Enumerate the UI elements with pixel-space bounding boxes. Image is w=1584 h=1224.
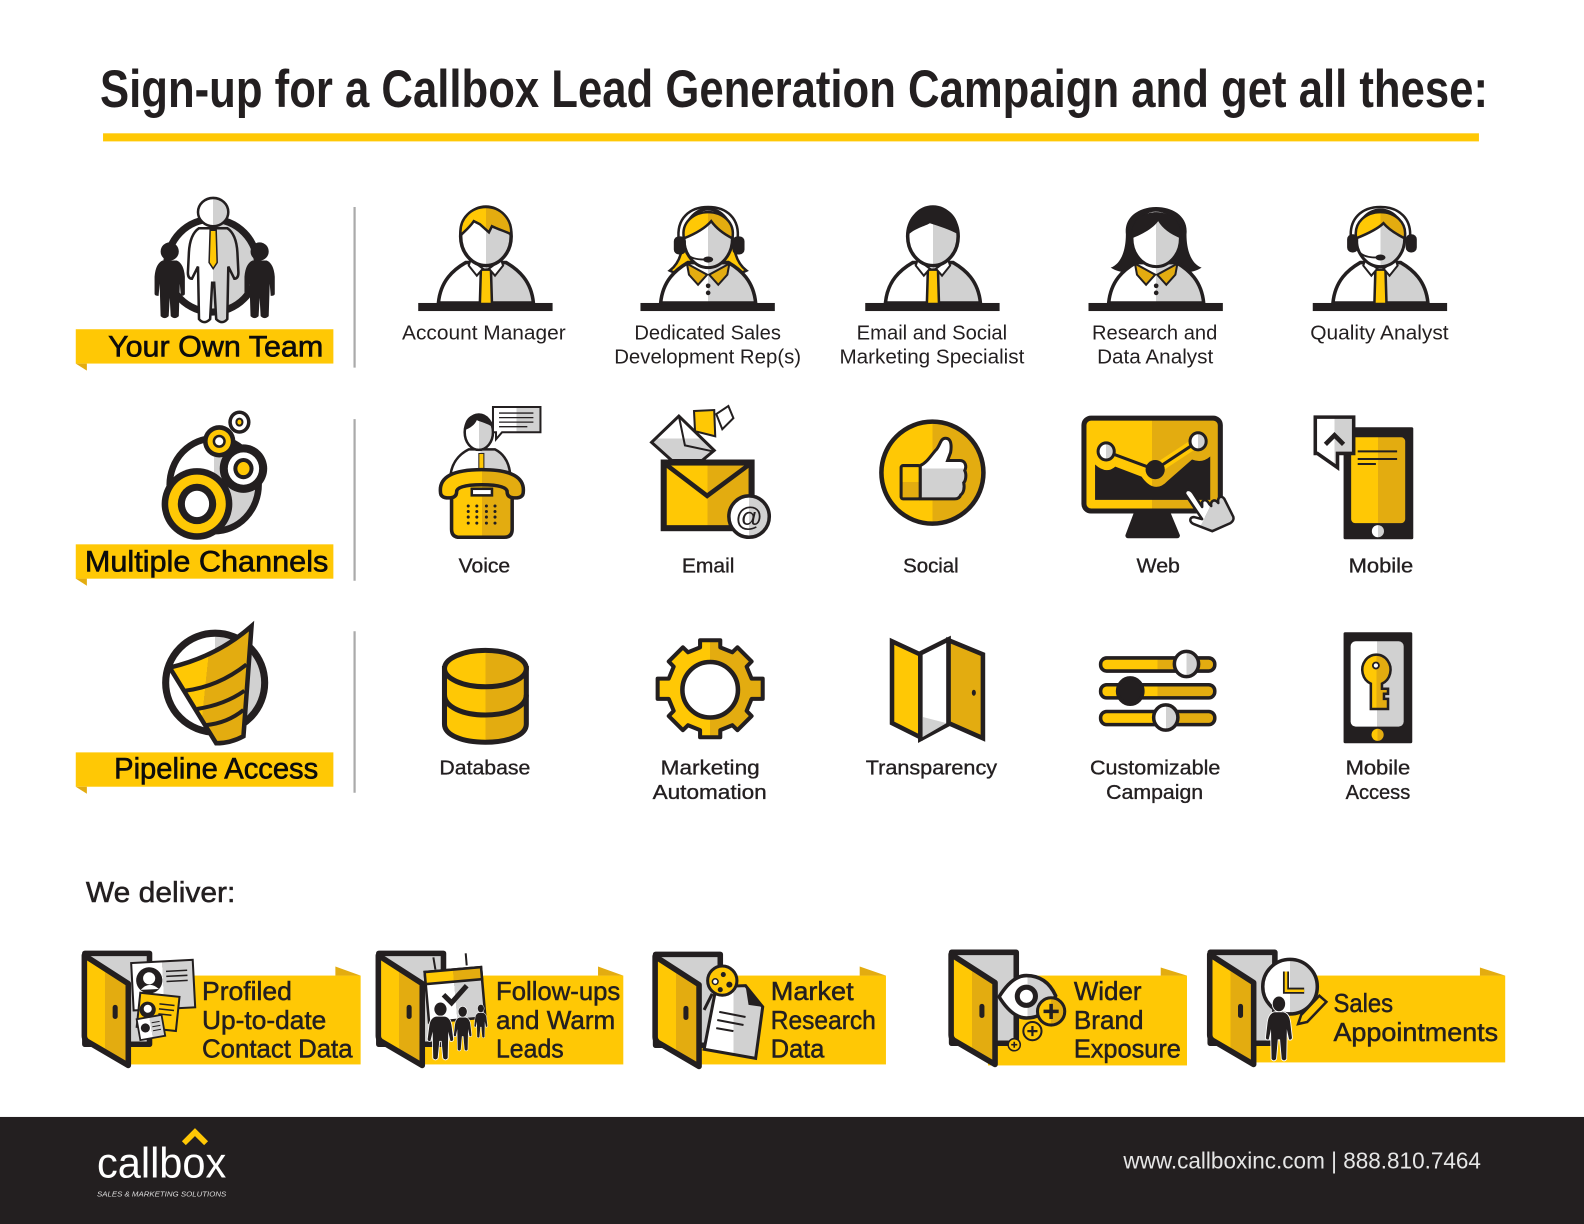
label: Contact Data [202,1033,353,1063]
label: social: Social [903,555,959,578]
label: dedicated sales development rep: Dedicated Sales [634,321,781,344]
deliverable: profiled up-to-date contact data [84,953,361,1065]
label: Wider [1074,976,1142,1006]
logo: callbox [97,1132,226,1199]
label: research and data analyst [1092,321,1217,369]
label: mobile access [1346,757,1410,804]
label: mobile access: Access [1346,781,1410,804]
label [1333,988,1498,1047]
label: dedicated sales development rep: Development Rep(s) [614,346,801,369]
label: and Warm [496,1005,615,1035]
label: mobile access: Mobile [1346,757,1410,780]
icon: research analyst [1088,207,1223,311]
label: quality analyst: Quality Analyst [1310,321,1449,344]
label: marketing automation: Automation [653,781,767,804]
label: research and data analyst: Data Analyst [1097,346,1213,369]
deliverable: sales appointments [1210,952,1505,1064]
label: Data [771,1033,825,1063]
label: email and social marketing specialist: Marketing Specialist [839,346,1025,369]
label: Research [771,1005,876,1035]
deliverable: follow-ups and warm leads [378,953,623,1065]
label: research and data analyst: Research and [1092,321,1217,344]
icon: monitor with chart and hand [1084,418,1234,538]
label: Follow-ups [496,976,620,1006]
item: social [881,422,983,578]
icon: door with calendar and people [378,953,487,1065]
icon: envelopes with at sign: @ [735,501,763,532]
label: Market [771,976,854,1006]
panel: multiple channels [76,411,333,586]
item: email [652,406,769,578]
icon: phone with key [1344,632,1412,743]
icon: door with document and magnifier [655,954,763,1066]
label: Sales [1333,988,1393,1018]
deliverable: wider brand exposure [951,952,1187,1065]
label [771,976,876,1063]
item: transparency [866,639,998,780]
icon: thumbs up [881,422,983,524]
item: email and social marketing specialist [839,207,1025,369]
icon: database cylinder [444,650,526,742]
heading: we deliver: We deliver: [86,876,235,908]
label: customizable campaign: Customizable [1090,757,1220,780]
label: Brand [1074,1005,1144,1035]
label: web: Web [1136,555,1180,578]
icon: agent with telephone [440,407,540,537]
panel: your own team [76,198,333,371]
banner ribbon [123,966,361,1064]
icon: slider controls [1101,651,1215,730]
footer bar [0,1117,1584,1224]
icon: door with clock and person [1210,952,1326,1064]
label: Profiled [202,976,292,1006]
icon: team in circle [155,198,275,322]
label: account manager: Account Manager [402,321,566,344]
banner: pipeline access: Pipeline Access [114,753,318,786]
label: email: Email [682,555,734,578]
icon: gear [658,640,763,737]
icon: door with eye and plus signs [951,952,1065,1064]
item: research and data analyst [1088,207,1223,369]
banner ribbon [1249,967,1505,1062]
icon: concentric channel rings [162,411,267,540]
icon: funnel in circle [166,626,265,743]
banner ribbon [417,966,623,1064]
label [1074,976,1181,1063]
label: email and social marketing specialist [839,321,1025,369]
contact details: www.callboxinc.com | 888.810.7464 [1122,1147,1481,1173]
label: voice: Voice [459,555,510,578]
item: marketing automation [653,640,767,804]
label: Leads [496,1033,564,1063]
icon: sales rep with headset [640,207,775,311]
label: customizable campaign [1090,757,1220,804]
logo: callbox: SALES & MARKETING SOLUTIONS [97,1190,226,1199]
icon: phone with speech bubble [1315,417,1413,539]
item: account manager [402,207,566,344]
icon: door with contact cards [84,953,195,1065]
label: Appointments [1333,1017,1498,1047]
item: voice [440,407,540,578]
label: marketing automation [653,757,767,804]
label: dedicated sales development rep [614,321,801,369]
label [496,976,620,1063]
label: database: Database [439,757,530,780]
item: quality analyst [1310,207,1449,344]
deliverable: market research data [655,954,886,1066]
item: mobile [1315,417,1413,578]
icon: marketing specialist [865,207,1000,311]
banner: your own team [76,329,333,371]
label: customizable campaign: Campaign [1106,781,1203,804]
label: transparency: Transparency [866,757,998,780]
icon: envelopes with at sign [652,406,769,537]
icon: account manager [418,207,553,311]
label: Up-to-date [202,1005,326,1035]
icon: open folding door [892,639,983,739]
panel: pipeline access [76,626,333,794]
item: dedicated sales development rep [614,207,801,369]
banner: pipeline access [76,752,333,794]
icon: quality analyst with headset [1313,207,1447,311]
banner: your own team: Your Own Team [108,330,323,363]
banner: multiple channels: Multiple Channels [85,546,328,579]
item: customizable campaign [1090,651,1220,804]
logo: callbox: callbox [97,1140,226,1187]
title underline [103,133,1479,141]
label: marketing automation: Marketing [661,757,760,780]
item: web [1084,418,1234,578]
banner ribbon [694,966,886,1064]
label: Exposure [1074,1033,1181,1063]
label: email and social marketing specialist: Email and Social [857,321,1007,344]
label [202,976,353,1063]
item: database [439,650,530,780]
item: mobile access [1344,632,1412,804]
label: mobile: Mobile [1349,555,1413,578]
banner ribbon [988,967,1187,1065]
